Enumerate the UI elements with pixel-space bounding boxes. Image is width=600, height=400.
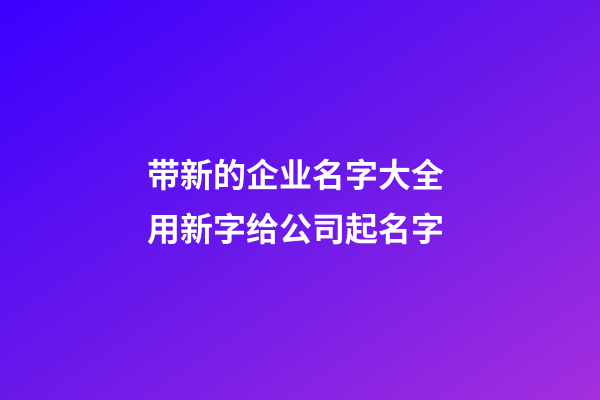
title: 用新字给公司起名字 <box>147 203 444 251</box>
title: 带新的企业名字大全 <box>147 149 444 197</box>
